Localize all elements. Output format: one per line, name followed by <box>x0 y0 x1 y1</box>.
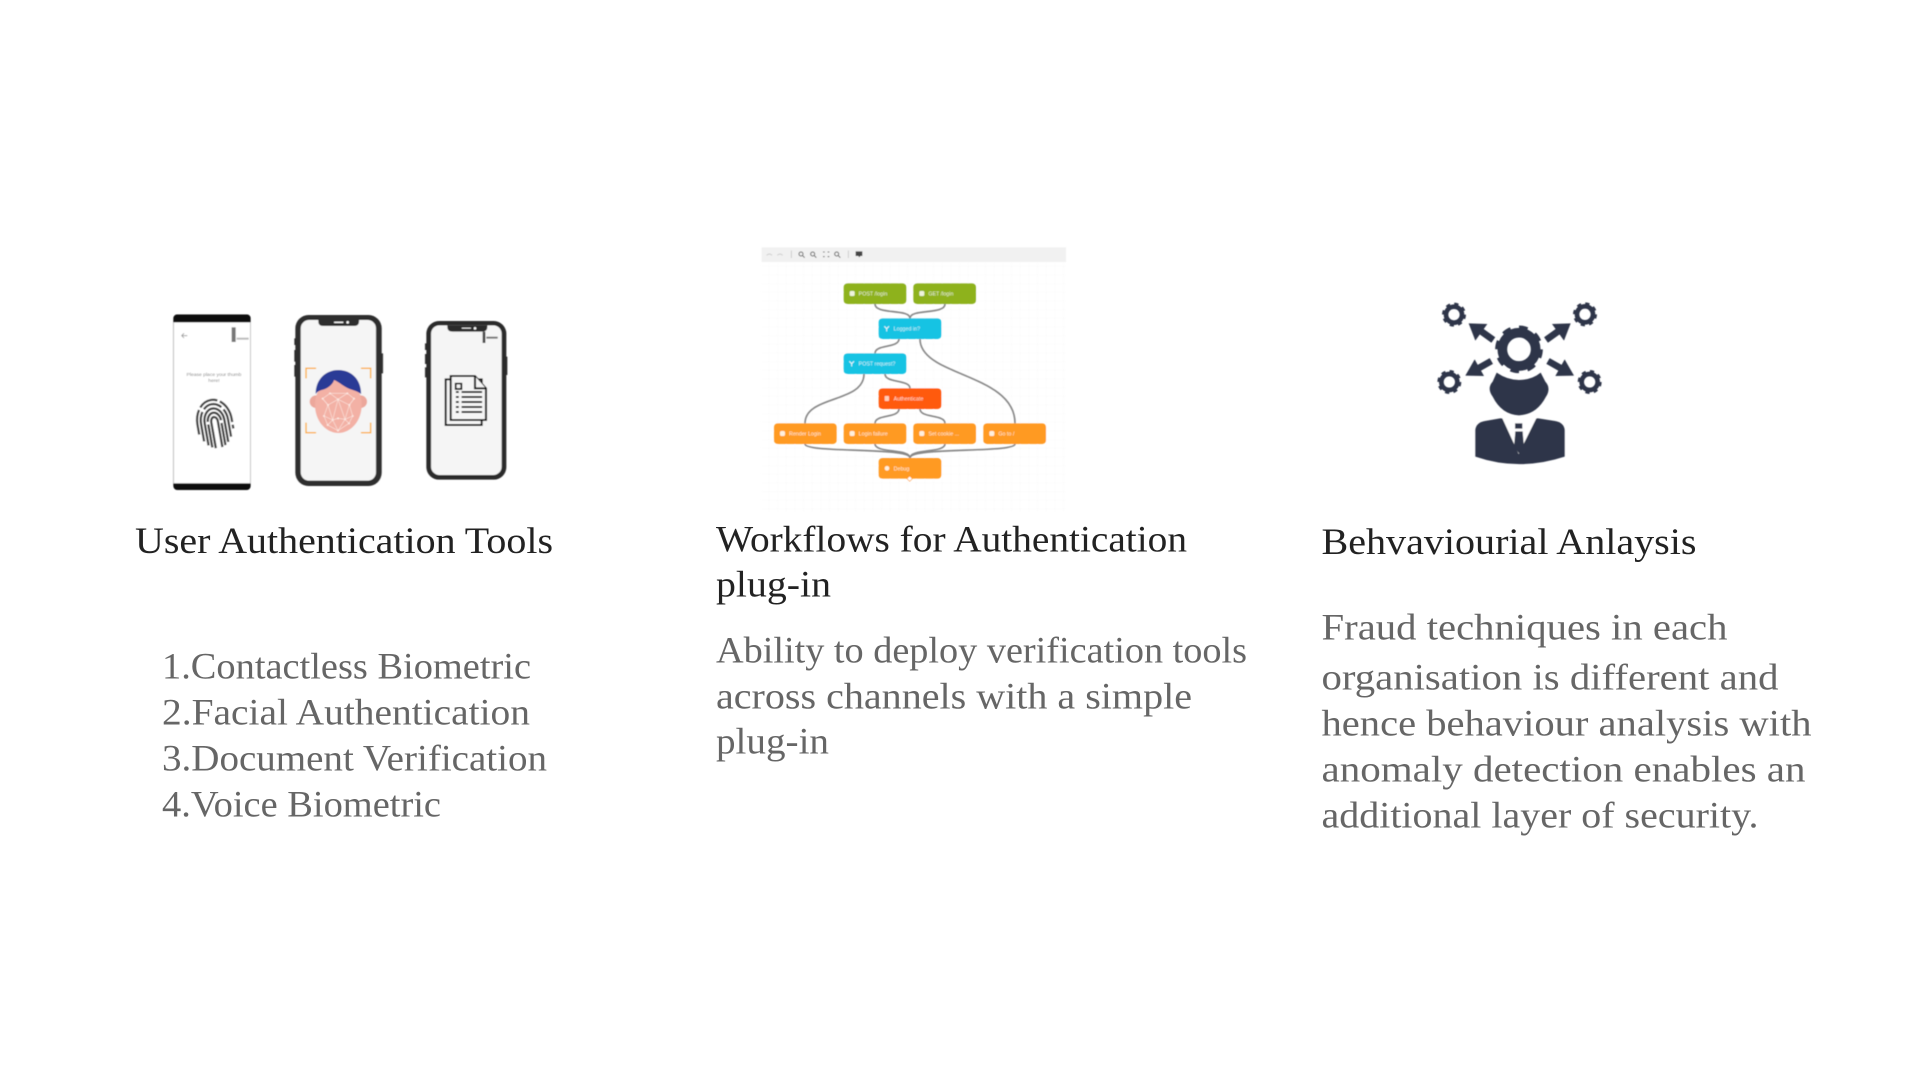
node: Logged in? <box>879 318 941 339</box>
text: behaviour description: anomaly detection enables an <box>1322 750 1806 790</box>
list: authentication methods <box>162 646 547 826</box>
node: Go to / <box>983 423 1046 444</box>
text: workflows description <box>716 630 1247 762</box>
node: Go to /: Go to / <box>998 432 1015 438</box>
node: Login failure <box>844 423 906 444</box>
node: Render Login: Render Login <box>789 432 821 438</box>
list: authentication methods: 1.Contactless Biometric <box>162 646 531 688</box>
phone: document verification <box>425 321 507 480</box>
text: workflows description: Ability to deploy verification tools <box>716 630 1247 672</box>
node: Debug: Debug <box>894 466 909 472</box>
text: behaviour description: organisation is different and <box>1322 658 1779 698</box>
node: POST request?: POST request? <box>859 361 895 367</box>
phone: fingerprint <box>173 314 251 490</box>
phone: fingerprint: Please place your thumb <box>187 372 242 378</box>
workflow diagram <box>762 247 1066 512</box>
node: Login failure: Login failure <box>859 432 888 438</box>
phone: fingerprint: here! <box>208 378 220 384</box>
panel: user authentication tools <box>135 314 553 826</box>
list: authentication methods: 2.Facial Authentication <box>162 692 530 734</box>
node: Render Login <box>774 423 837 444</box>
node: POST /login <box>844 283 906 304</box>
phone: facial recognition <box>294 315 383 486</box>
heading: workflows: Workflows for Authentication <box>716 520 1187 560</box>
text: workflows description: across channels with a simple <box>716 676 1192 718</box>
node: GET /login <box>913 283 976 304</box>
list: authentication methods: 3.Document Verification <box>162 738 547 780</box>
icon: fingerprint <box>194 397 236 451</box>
heading: workflows <box>716 520 1187 606</box>
text: behaviour description: additional layer of security. <box>1322 796 1758 836</box>
icon: person with gears <box>1439 304 1600 464</box>
panel: behavioural analysis <box>1322 304 1812 837</box>
icon: face mesh <box>306 368 371 433</box>
node: Set cookie <box>913 423 976 444</box>
text: behaviour description: Fraud techniques in each <box>1322 608 1728 648</box>
phone illustrations <box>173 314 507 490</box>
central gear <box>1497 328 1541 371</box>
node: GET /login: GET /login <box>928 292 953 298</box>
arrows <box>1465 323 1574 376</box>
text: behaviour description: hence behaviour analysis with <box>1322 704 1812 744</box>
node: Authenticate: Authenticate <box>894 397 923 403</box>
small gears <box>1439 304 1600 393</box>
node: Logged in?: Logged in? <box>894 327 920 333</box>
heading: behavioural analysis: Behvaviourial Anlaysis <box>1322 522 1696 563</box>
node: POST request? <box>844 353 906 374</box>
heading: workflows: plug-in <box>716 564 831 606</box>
connectors <box>805 304 1015 458</box>
heading: user authentication tools: User Authentication Tools <box>135 521 553 562</box>
list: authentication methods: 4.Voice Biometric <box>162 784 441 826</box>
node: Debug <box>879 458 941 481</box>
icon: document <box>446 376 486 425</box>
torso <box>1475 418 1565 464</box>
node: Authenticate <box>879 388 941 409</box>
toolbar <box>762 247 1066 262</box>
panel: workflows for authentication plug-in <box>716 247 1247 763</box>
node: Set cookie: Set cookie ... <box>928 432 959 438</box>
text: behaviour description <box>1322 608 1812 836</box>
node: POST /login: POST /login <box>859 292 887 298</box>
text: workflows description: plug-in <box>716 722 829 762</box>
head <box>1490 373 1549 415</box>
